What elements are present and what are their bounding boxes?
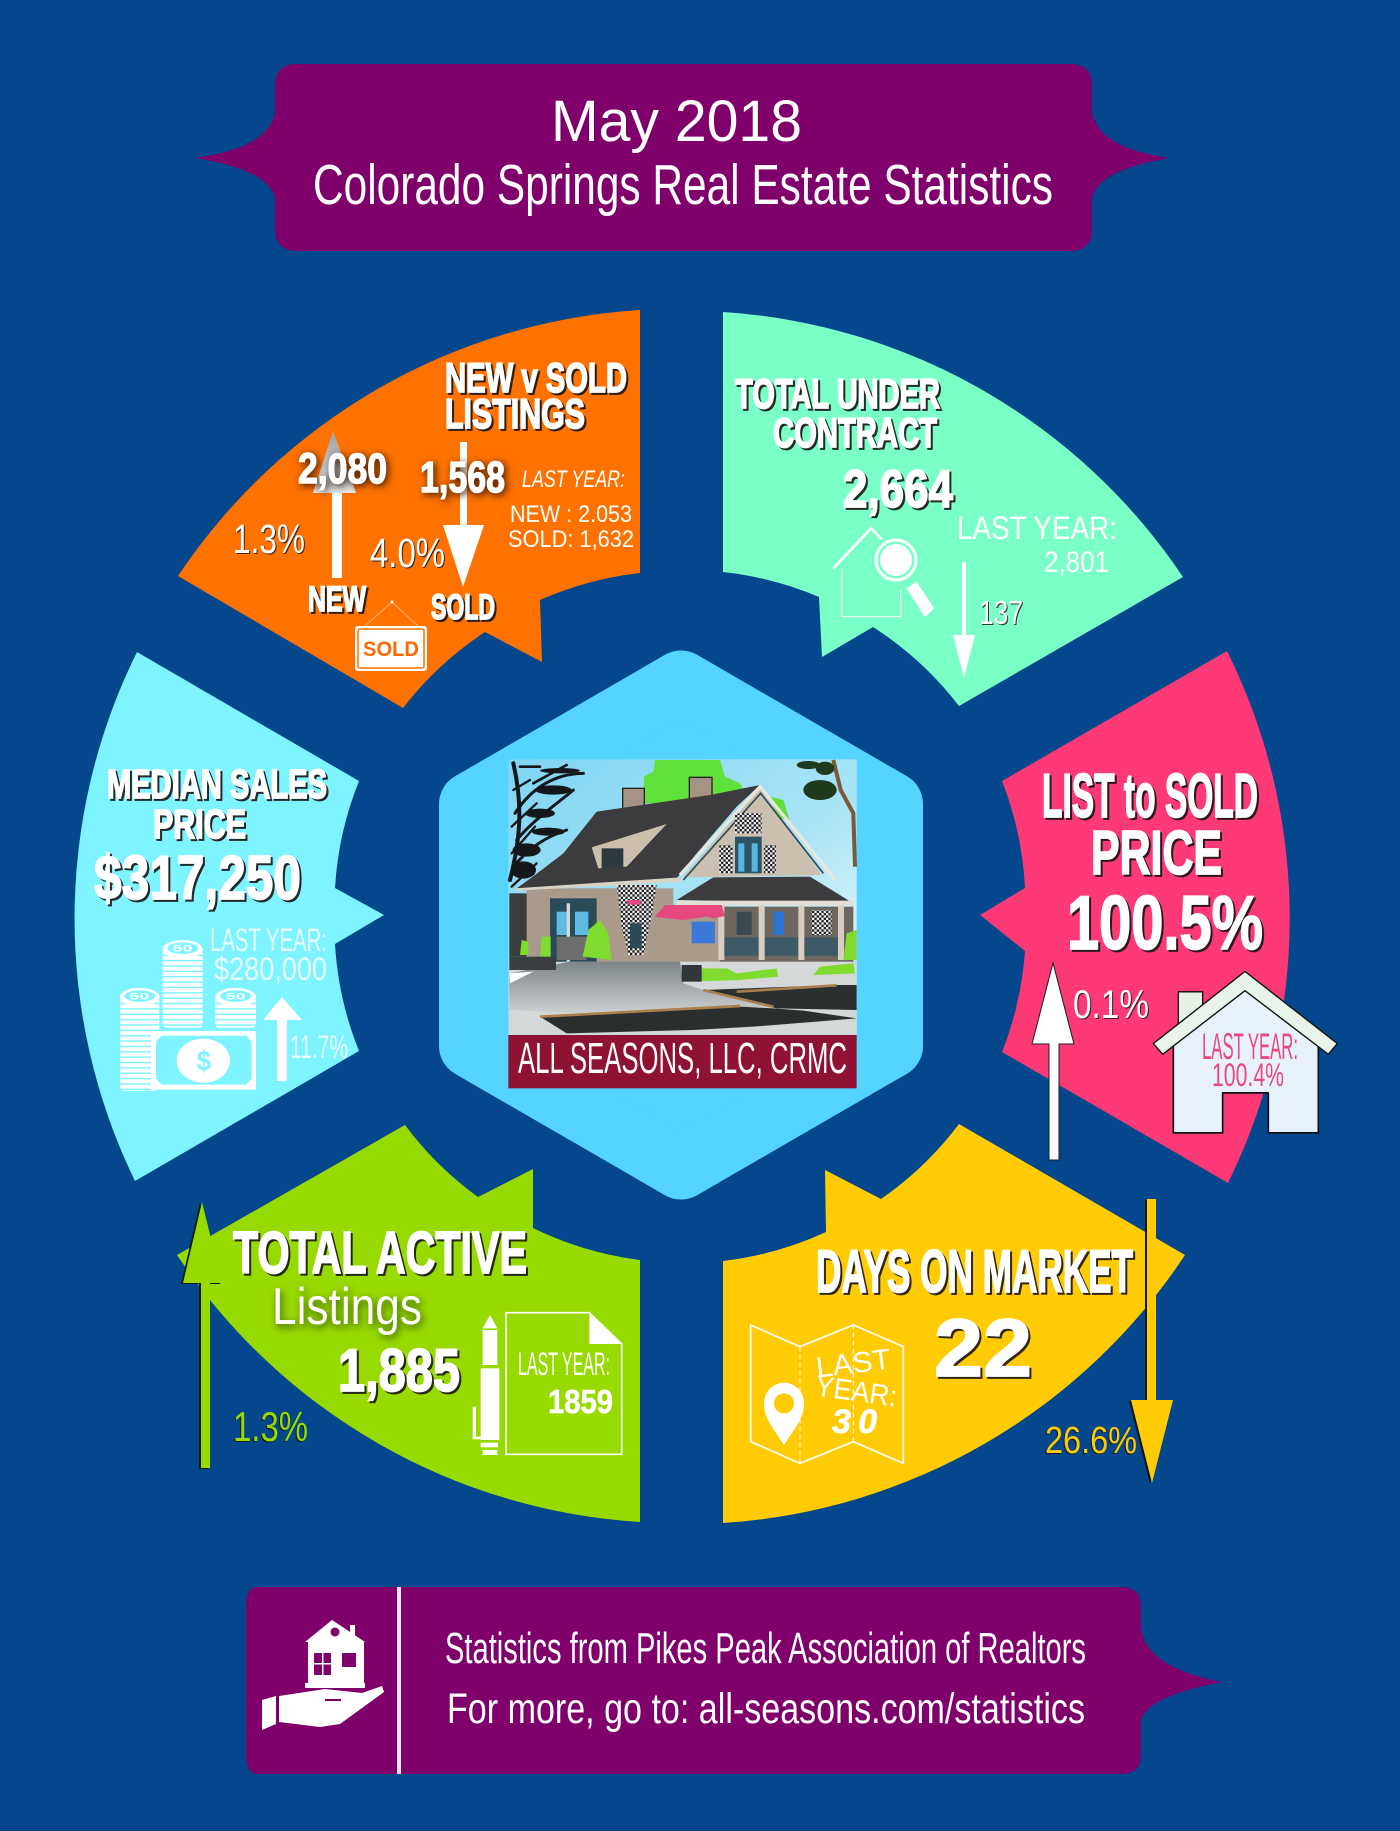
up arrow: new (313, 432, 356, 578)
last year figures: NEW : 2.053 (510, 501, 632, 528)
title banner (195, 64, 1170, 251)
subheading: Listings (272, 1278, 422, 1336)
icon: document with last year figure: 1859 (548, 1383, 613, 1420)
heading: PRICE (1091, 819, 1222, 888)
value: 100.5% (1067, 881, 1263, 966)
heading: TOTAL ACTIVE (233, 1220, 527, 1286)
new count: 2,080 (298, 445, 387, 493)
icon: coins and banknote: 50 (129, 991, 149, 1001)
light blue segment (75, 652, 384, 1181)
icon: document with last year figure: LAST YEAR: (518, 1346, 610, 1382)
icon: sold sign: SOLD (363, 638, 419, 661)
last year figures: 2,801 (1044, 546, 1109, 579)
heading: PRICE (153, 801, 246, 847)
icon: map with last year figure: LAST (814, 1344, 893, 1385)
sold label: SOLD (431, 588, 495, 627)
title: subtitle: Colorado Springs Real Estate Statistics (313, 153, 1053, 217)
panel: total under contract (723, 312, 1183, 706)
footer shape (246, 1587, 1222, 1774)
icon: map with last year figure: 30 (832, 1403, 877, 1441)
panel: list to sold price (980, 651, 1337, 1183)
icon: document with last year figure (506, 1313, 622, 1454)
value: 2,664 (843, 460, 953, 519)
heading (445, 354, 627, 437)
heading (107, 761, 327, 847)
house drawing (508, 759, 857, 1088)
last year figures (210, 922, 327, 987)
title: month: May 2018 (551, 89, 802, 154)
heading: DAYS ON MARKET (816, 1238, 1133, 1305)
last year figures: $280,000 (214, 951, 327, 987)
heading (735, 370, 940, 456)
new change: 1.3% (233, 516, 305, 562)
heading: LISTINGS (445, 390, 585, 437)
banner shape (195, 64, 1170, 251)
change: 11.7% (290, 1029, 348, 1065)
footer divider (397, 1587, 401, 1774)
value: 22 (934, 1303, 1032, 1394)
panel: days on market (723, 1124, 1185, 1523)
last year figures: SOLD: 1,632 (508, 526, 634, 553)
panel: total active listings (177, 1125, 640, 1522)
icon: coins and banknote (120, 940, 256, 1091)
last year figures (508, 466, 634, 553)
company name: ALL SEASONS, LLC, CRMC (518, 1034, 847, 1083)
yellow segment (723, 1124, 1185, 1523)
heading: NEW v SOLD (445, 354, 627, 401)
icon: coins and banknote: 50 (226, 991, 246, 1001)
icon: house with last year figure: 100.4% (1212, 1057, 1284, 1093)
icon: map with last year figure (751, 1325, 903, 1463)
green segment (177, 1125, 640, 1522)
down arrow (1131, 1199, 1173, 1483)
icon: sold sign (355, 600, 427, 671)
footer text (445, 1624, 1086, 1733)
value: 1,885 (338, 1337, 460, 1404)
last year figures: LAST YEAR: (210, 922, 327, 958)
change: 1.3% (233, 1403, 308, 1450)
icon: map with last year figure: YEAR: (813, 1370, 899, 1414)
down arrow: sold (443, 442, 484, 587)
icon: house with magnifier (833, 528, 934, 617)
footer text: For more, go to: all-seasons.com/statistics (447, 1685, 1085, 1733)
up arrow (263, 997, 302, 1081)
up arrow (1032, 963, 1074, 1160)
house illustration with company name (508, 759, 857, 1088)
footer text: Statistics from Pikes Peak Association of Realtors (445, 1624, 1086, 1673)
panel: median sales price (75, 652, 384, 1181)
last year figures: LAST YEAR: (522, 466, 625, 493)
sold change: 4.0% (370, 530, 445, 576)
icon: pen (473, 1315, 499, 1455)
teal segment (723, 312, 1183, 706)
down arrow (953, 562, 975, 678)
heading: TOTAL UNDER (735, 370, 940, 417)
icon: house with last year figure (1153, 971, 1337, 1133)
change: 137 (979, 594, 1023, 631)
orange segment (178, 310, 640, 708)
pink segment (980, 651, 1290, 1183)
icon: house in hand (262, 1620, 384, 1730)
sold count: 1,568 (420, 453, 505, 502)
last year figures (957, 510, 1117, 579)
heading (1042, 762, 1258, 888)
centre hexagon (471, 682, 891, 1168)
up arrow (183, 1202, 222, 1468)
icon: coins and banknote: 50 (173, 943, 193, 953)
new label: NEW (308, 580, 366, 619)
value: $317,250 (94, 844, 301, 913)
footer banner (246, 1587, 1222, 1774)
heading: MEDIAN SALES (107, 761, 327, 807)
change: 26.6% (1045, 1420, 1137, 1462)
panel: new v sold listings (178, 310, 640, 708)
last year figures: LAST YEAR: (957, 510, 1117, 546)
icon: coins and banknote: $ (197, 1046, 211, 1077)
change: 0.1% (1073, 983, 1149, 1027)
heading: CONTRACT (773, 409, 937, 456)
